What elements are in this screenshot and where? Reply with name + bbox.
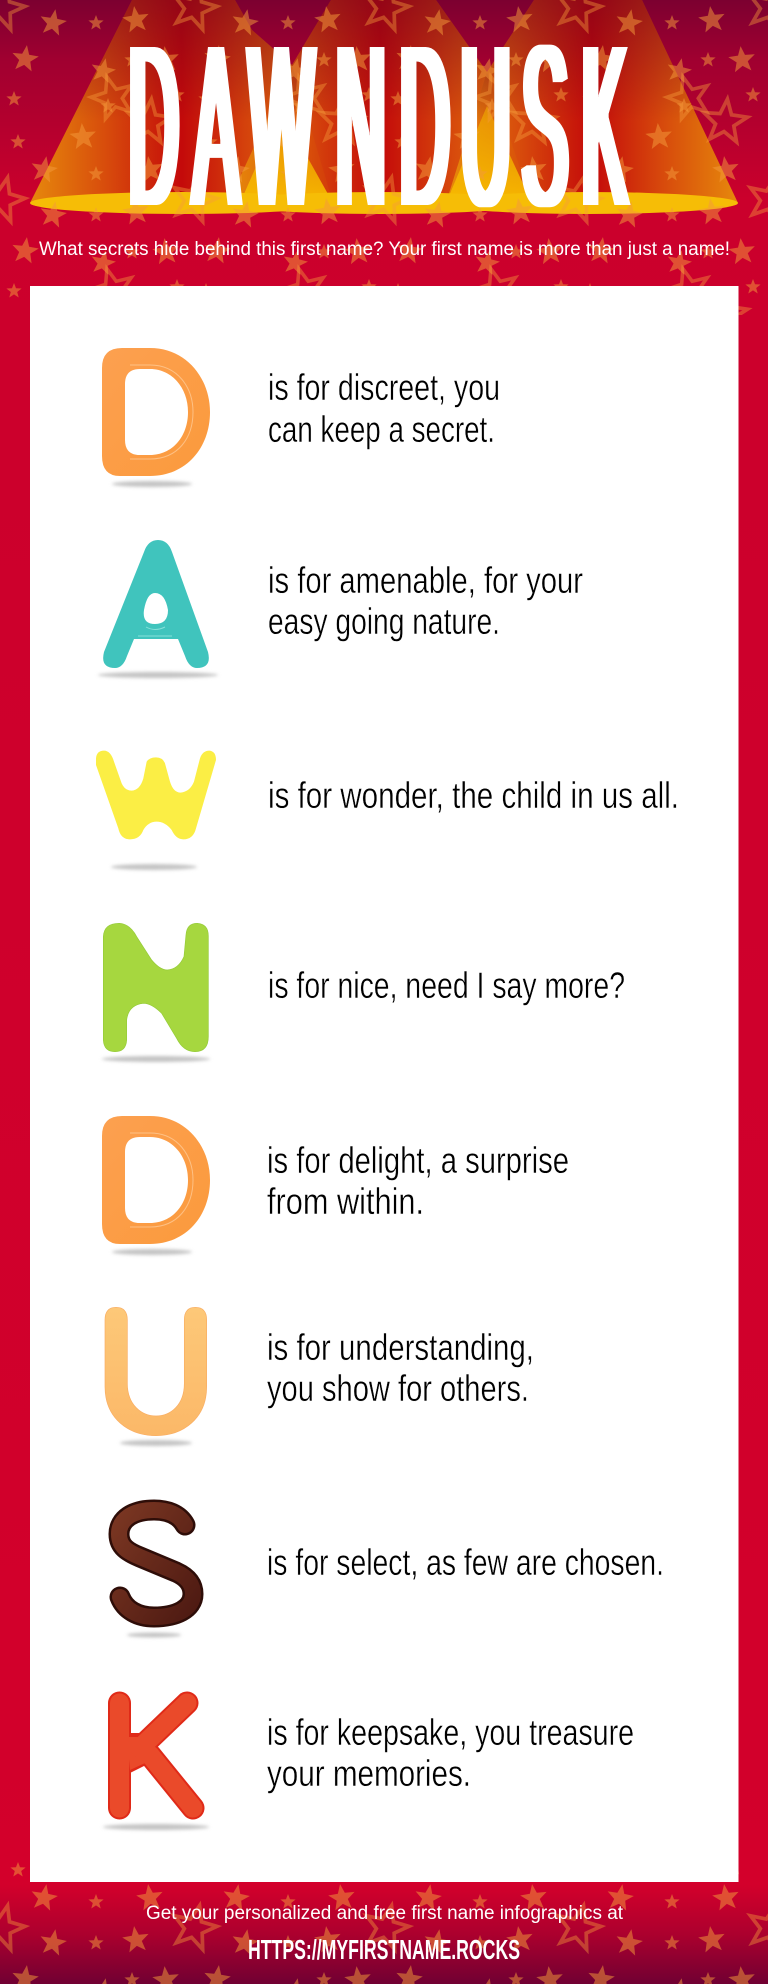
text: U: you show for others. (267, 1368, 529, 1409)
text: A: is for amenable, for your (268, 560, 583, 601)
icon: letter K (red) (103, 1703, 209, 1830)
text: K (267, 1712, 634, 1794)
text: A: easy going nature. (268, 601, 500, 642)
text: D (268, 367, 500, 450)
text: N: is for nice, need I say more? (268, 965, 625, 1006)
text: K: your memories. (267, 1753, 471, 1794)
panel: letters (30, 286, 738, 1882)
text: A (268, 560, 583, 642)
icon: letter A (teal) (98, 540, 218, 678)
text: D second: from within. (267, 1181, 424, 1222)
icon: letter U (pale orange) (105, 1307, 207, 1446)
text: K: is for keepsake, you treasure (267, 1712, 634, 1753)
text: D: can keep a secret. (268, 409, 495, 450)
text: D: is for discreet, you (268, 367, 500, 408)
icon: letter D (orange, second) (102, 1116, 210, 1255)
icon: letter N (green) (102, 923, 210, 1062)
star pattern: footer (0, 1860, 768, 1984)
text: U: is for understanding, (267, 1327, 534, 1368)
text: U (267, 1327, 534, 1409)
spotlights (30, 0, 738, 214)
footer url: HTTPS://MYFIRSTNAME.ROCKS (248, 1934, 520, 1965)
star pattern: header (0, 0, 768, 315)
icon: letter S (brown) (119, 1510, 193, 1638)
title: DAWNDUSK (129, 0, 628, 257)
text: D second: is for delight, a surprise (267, 1140, 569, 1181)
text: W: is for wonder, the child in us all. (268, 775, 679, 816)
icon: letter W (yellow) (96, 751, 216, 870)
footer text: Get your personalized and free first name infographics at (146, 1903, 624, 1924)
icon: letter D (orange) (102, 348, 210, 487)
text: D second (267, 1140, 569, 1222)
subtitle: What secrets hide behind this first name? Your first name is more than just a name! (39, 239, 730, 260)
